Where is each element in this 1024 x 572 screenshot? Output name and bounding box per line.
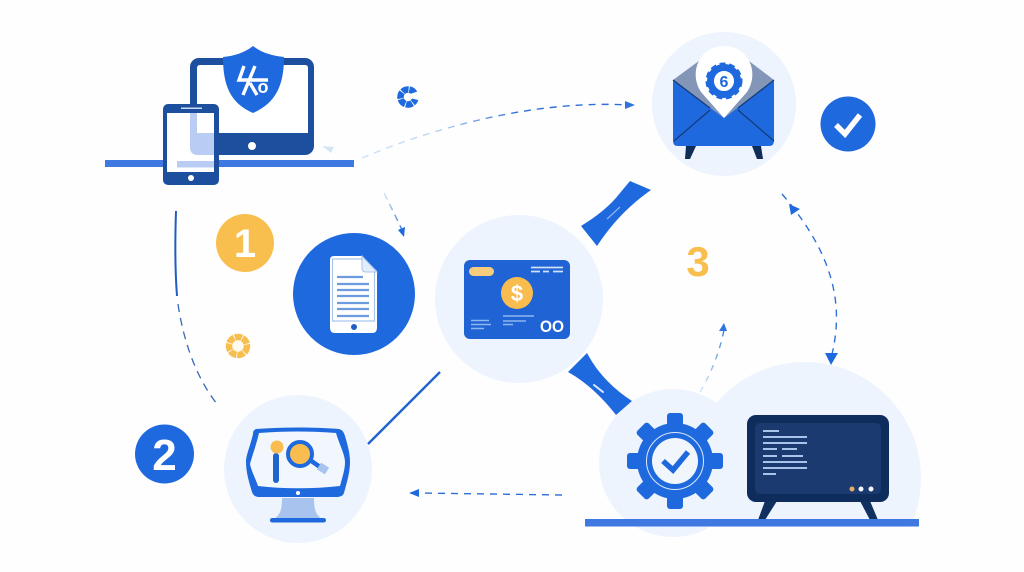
location pin [696,46,752,118]
arrow: dashed to document [384,193,405,237]
arrow: dashed left to analysis monitor [409,489,562,497]
envelope flap [673,58,774,118]
arrow: left line and dashed curve [175,211,217,404]
background circle: card [435,215,603,383]
icon: shield: o [258,77,268,97]
number 1 badge: 1 [234,222,256,266]
background circle: envelope [652,32,796,176]
monitor stand [274,498,322,519]
arrow: top dashed curve to envelope [322,101,635,158]
icon: check badge [820,96,876,152]
envelope body [673,80,774,146]
background circle: gear [599,389,747,537]
panel: payment card [464,260,570,339]
icon: magnifier [288,442,327,471]
icon: dollar coin: $ [511,281,523,306]
arrow: double-headed dashed curve envelope to screen [782,194,838,365]
infographic canvas [105,32,921,543]
icon: gear with check [627,413,723,509]
number 1 badge [216,214,274,272]
number 2 badge [135,424,194,484]
dark screen [747,415,889,502]
icon: small blue cog [400,90,422,104]
panel: envelope [673,46,774,159]
connector: card to analysis monitor [368,372,440,444]
shelf [585,519,919,526]
icon: small yellow cog [229,337,247,355]
connector: wedge card to gear [568,353,632,415]
icon: phone [163,104,219,185]
icon: desktop monitor [190,58,314,155]
number 3: 3 [686,238,710,285]
background circle: analysis monitor [224,395,372,543]
icon: pin chart [270,440,284,483]
icon: document [330,256,377,333]
panel: analysis monitor [246,428,350,522]
panel: gear and screen [585,413,919,526]
number 2 badge: 2 [152,431,177,480]
shelf [105,160,354,167]
arrow: dashed upward near number 3 [700,323,727,392]
screen legs [758,501,878,520]
monitor frame [246,428,350,497]
background circle: screen [710,362,921,527]
envelope legs [685,146,763,159]
panel: document circle [293,233,415,355]
panel: devices with shield [105,46,354,185]
connector: wedge card to envelope [581,181,651,246]
icon: gear: 6 [720,74,729,91]
card digits: OO [540,317,564,336]
icon: shield [223,46,284,113]
